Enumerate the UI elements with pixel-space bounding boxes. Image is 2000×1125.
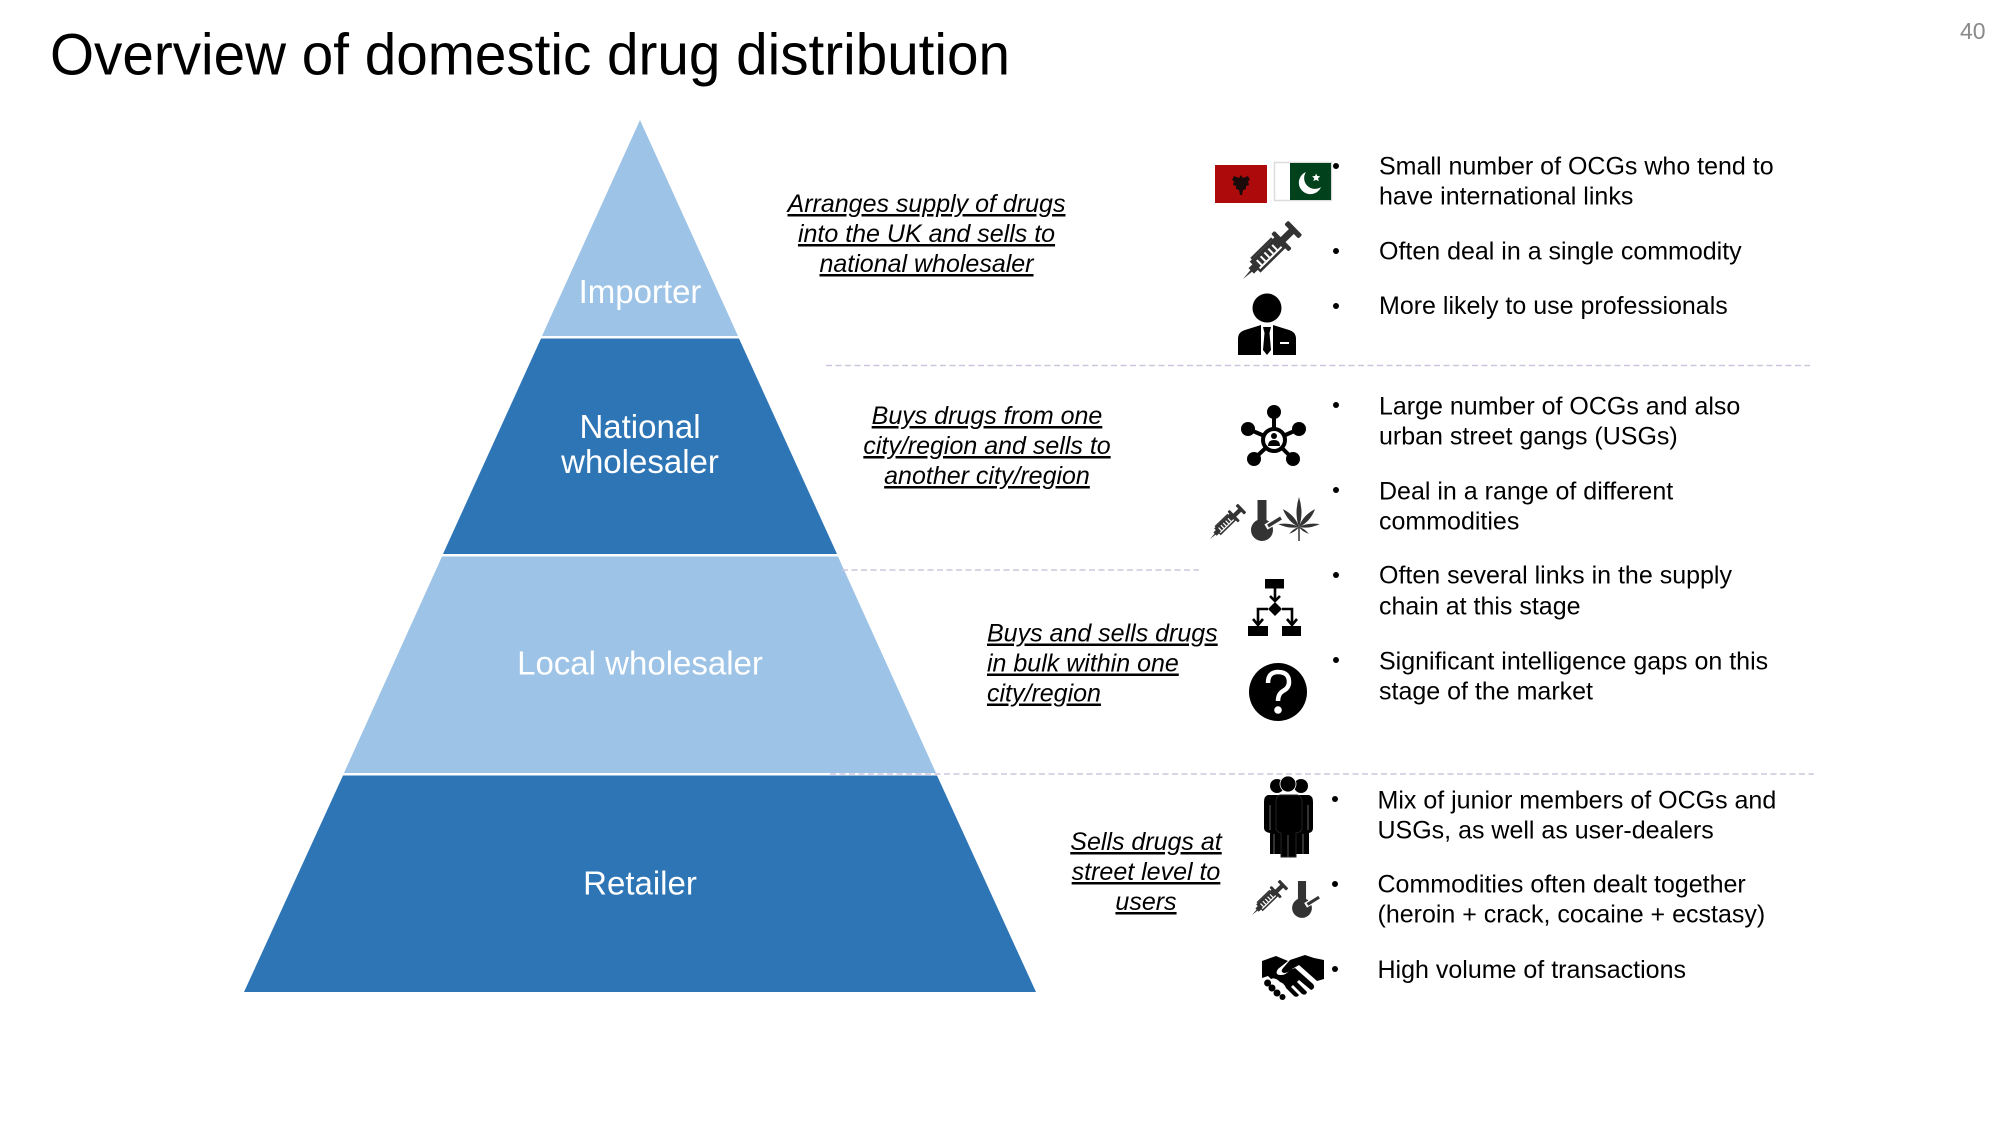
bullet text: commodities together xyxy=(1332,870,1765,928)
tier: national wholesaler: wholesaler xyxy=(560,443,719,480)
bullet text: small number of OCGs xyxy=(1333,152,1774,210)
icon: flowchart xyxy=(1248,579,1301,636)
bullet text: large number of OCGs: urban street gangs (USGs) xyxy=(1379,422,1678,450)
tier: local wholesaler: Local wholesaler xyxy=(517,644,763,682)
bullet text: several links: Often several links in the supply xyxy=(1379,562,1732,590)
bullet text: small number of OCGs: have international links xyxy=(1379,182,1633,210)
icon: syringe and bong xyxy=(1247,879,1319,920)
tier: importer: Importer xyxy=(579,273,701,310)
role description: importer: national wholesaler xyxy=(819,250,1035,278)
icon: group of people xyxy=(1264,776,1313,857)
tier: national wholesaler: National xyxy=(579,408,701,445)
tier: importer xyxy=(542,120,738,336)
role description: national wholesaler: city/region and sells to xyxy=(863,432,1111,460)
tier: retailer xyxy=(244,776,1036,992)
role description: local wholesaler: in bulk within one xyxy=(987,650,1179,678)
role description: retailer: users xyxy=(1115,888,1177,916)
icon: professional person xyxy=(1238,294,1296,355)
bullet text: mix of junior members: USGs, as well as user-dealers xyxy=(1378,816,1714,844)
role description: importer: Arranges supply of drugs xyxy=(786,190,1065,218)
bullet text: several links xyxy=(1333,562,1732,620)
role description: retailer: Sells drugs at xyxy=(1070,828,1223,856)
bullet text: single commodity: Often deal in a single commodity xyxy=(1379,237,1742,265)
bullet text: intelligence gaps: stage of the market xyxy=(1379,678,1593,706)
bullet text: intelligence gaps: Significant intelligence gaps on this xyxy=(1379,648,1768,676)
bullet text: range of commodities: commodities xyxy=(1379,508,1519,536)
icon: flag of Pakistan xyxy=(1274,162,1332,200)
tier: national wholesaler xyxy=(443,338,837,554)
icon: network xyxy=(1241,405,1306,466)
tier: local wholesaler xyxy=(344,556,936,773)
tier: retailer: Retailer xyxy=(583,864,697,902)
icon: handshake xyxy=(1262,955,1324,1000)
role description: national wholesaler: Buys drugs from one xyxy=(872,402,1102,430)
bullet text: large number of OCGs: Large number of OCGs and also xyxy=(1379,392,1740,420)
bullet text: range of commodities xyxy=(1333,478,1673,536)
role description: retailer xyxy=(1070,828,1223,916)
bullet text: range of commodities: Deal in a range of different xyxy=(1379,478,1673,506)
pyramid xyxy=(244,120,1036,992)
bullet text: several links: chain at this stage xyxy=(1379,592,1581,620)
bullet text: high volume: High volume of transactions xyxy=(1378,956,1686,984)
role description: national wholesaler xyxy=(863,402,1111,490)
icon: question mark xyxy=(1249,663,1307,721)
icon: flag of Albania xyxy=(1215,165,1267,203)
bullet text: professionals: More likely to use professionals xyxy=(1379,292,1728,320)
icon: syringe, bong and cannabis leaf xyxy=(1205,497,1320,544)
role description: importer: into the UK and sells to xyxy=(798,220,1055,248)
role description: retailer: street level to xyxy=(1072,858,1220,886)
role description: national wholesaler: another city/region xyxy=(884,462,1090,490)
icon: syringe xyxy=(1234,219,1304,288)
bullet text: mix of junior members xyxy=(1332,786,1776,844)
bullet text: mix of junior members: Mix of junior members of OCGs and xyxy=(1378,786,1776,814)
bullet text: commodities together: Commodities often dealt together xyxy=(1378,870,1746,898)
title: Overview of domestic drug distribution xyxy=(50,22,1010,88)
bullet text: small number of OCGs: Small number of OCGs who tend to xyxy=(1379,152,1774,180)
bullet text: intelligence gaps xyxy=(1333,648,1768,706)
role description: local wholesaler: city/region xyxy=(987,680,1101,708)
bullet text: large number of OCGs xyxy=(1333,392,1740,450)
role description: local wholesaler: Buys and sells drugs xyxy=(987,620,1218,648)
bullet text: commodities together: (heroin + crack, cocaine + ecstasy) xyxy=(1378,900,1765,928)
role description: local wholesaler xyxy=(987,620,1218,708)
role description: importer xyxy=(786,190,1065,278)
page number: 40 xyxy=(1960,18,1986,44)
